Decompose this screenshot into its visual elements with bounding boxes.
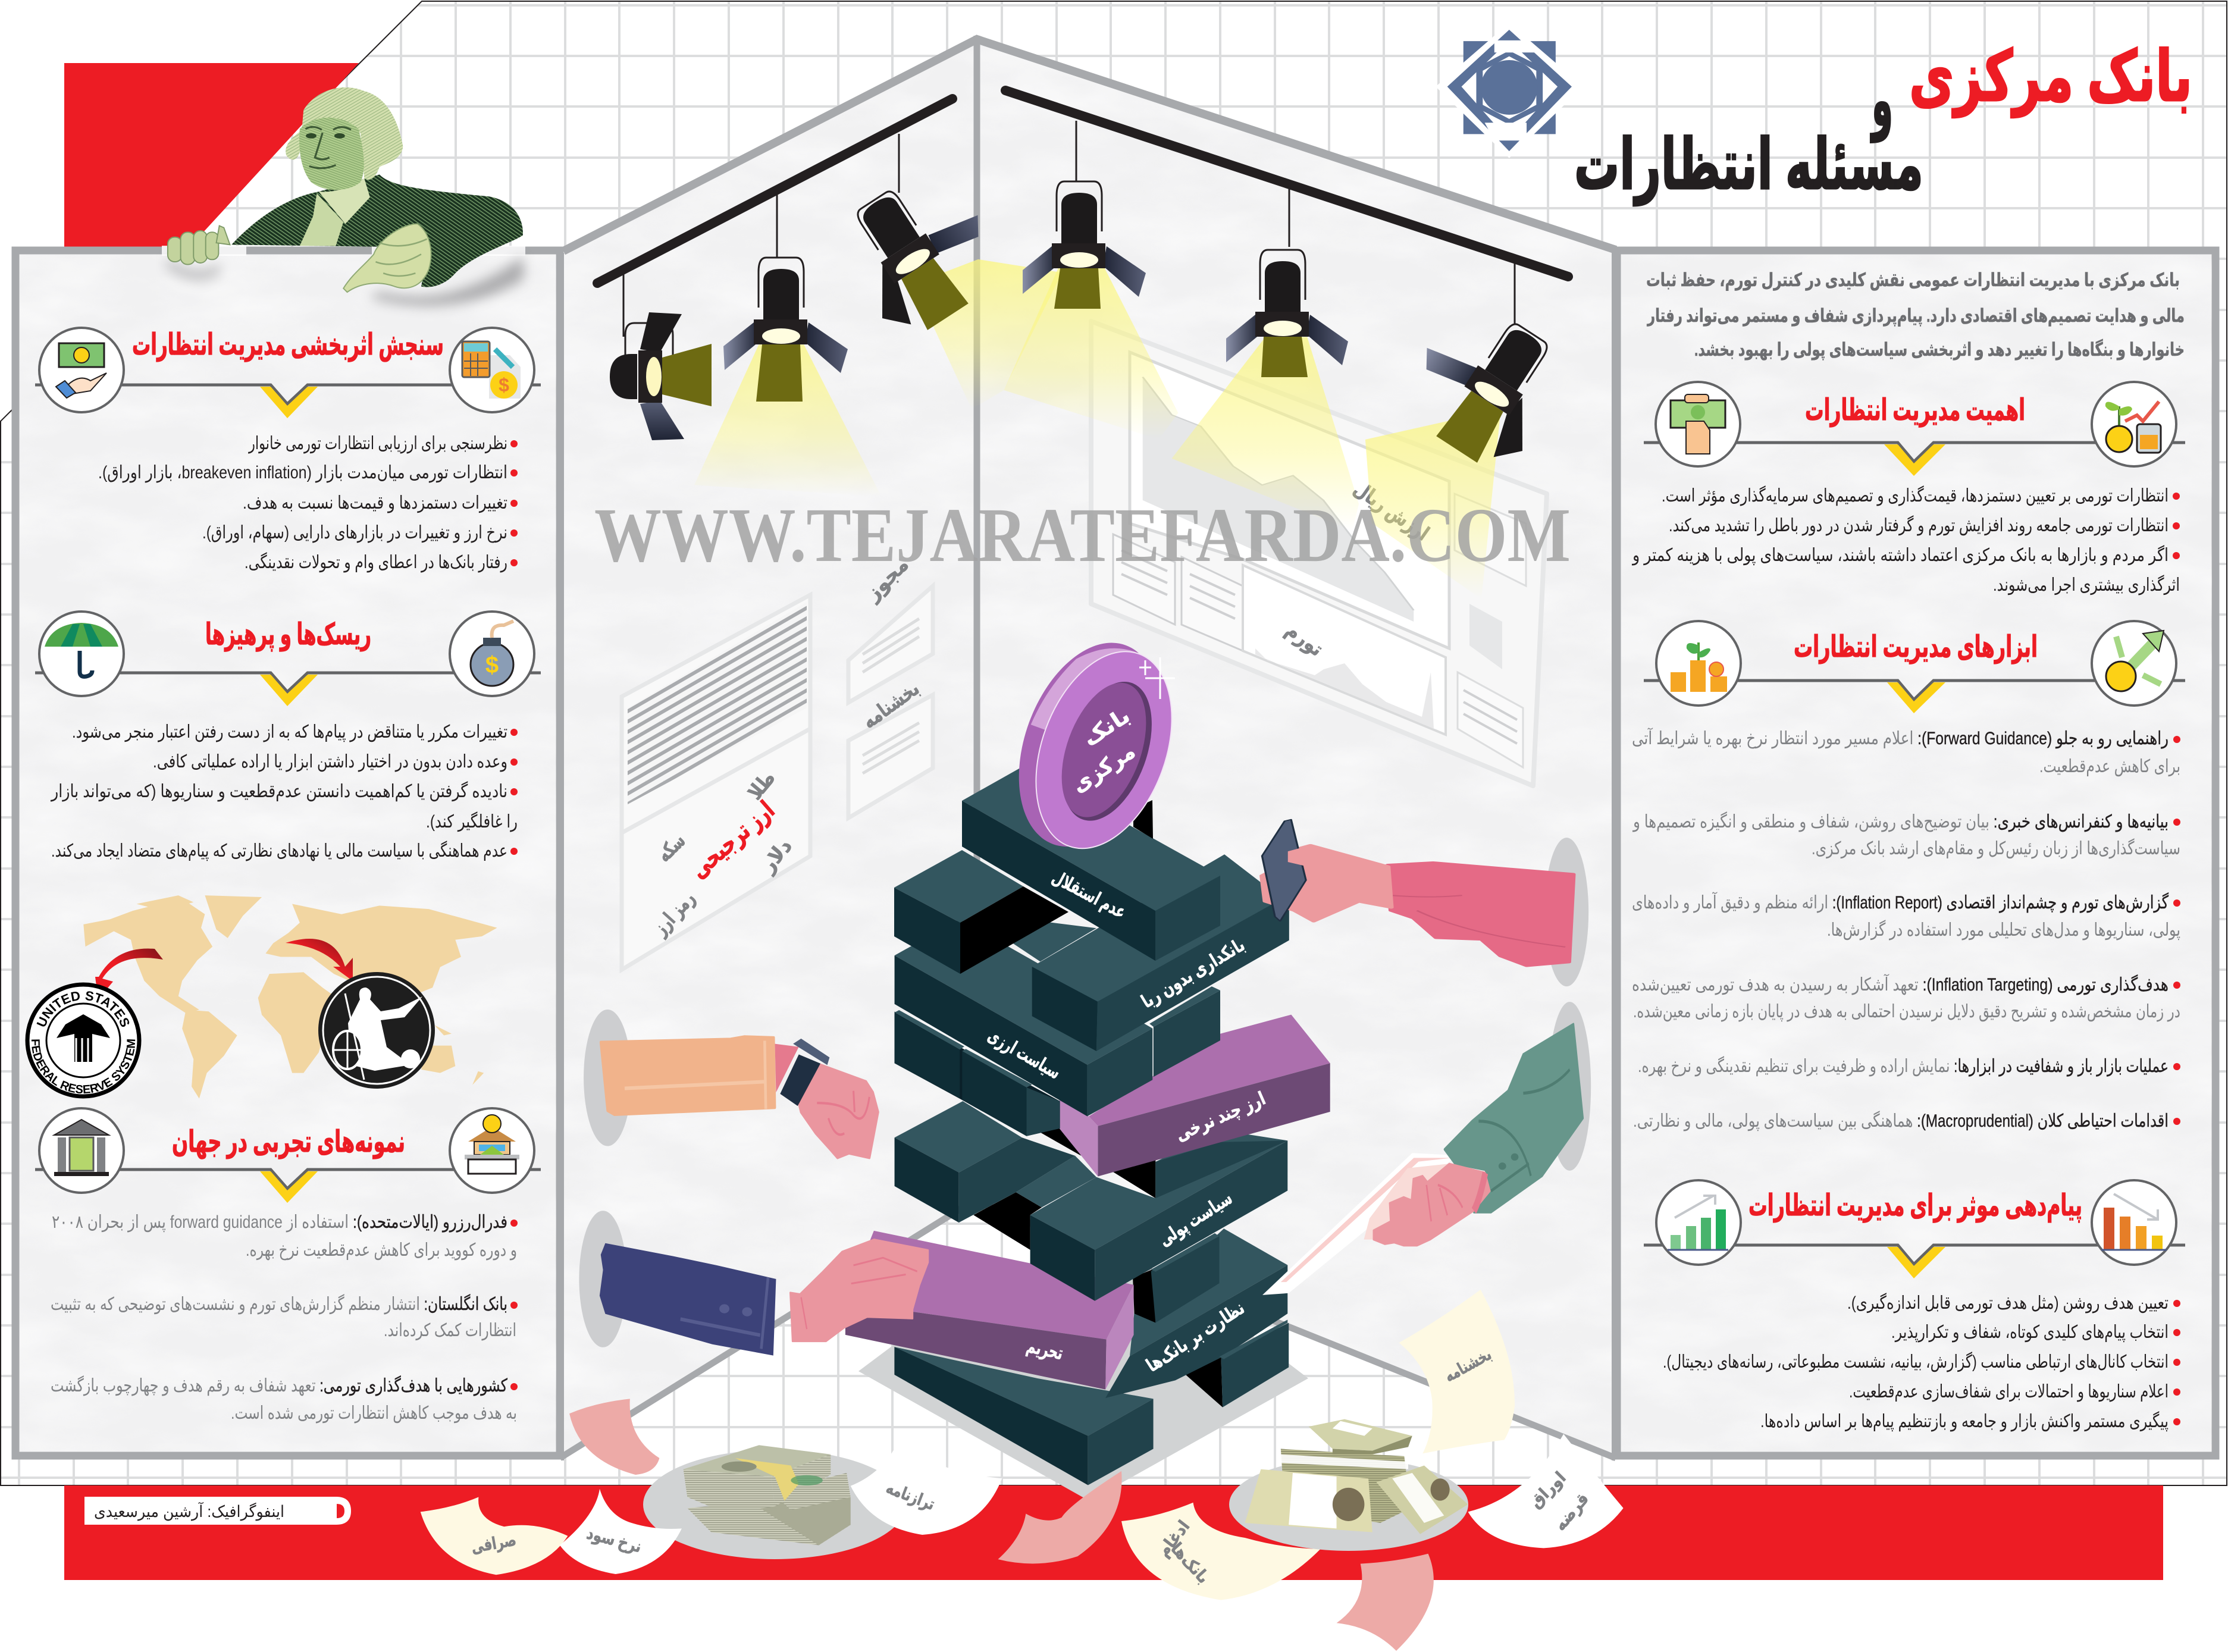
block label: currency policy: سیاست ارزی: [984, 1025, 1064, 1083]
label: licence: مجوز: [860, 553, 913, 606]
block label: interest-free banking: بانکداری بدون ربا: [1137, 934, 1249, 1012]
purple sanction block top: [845, 1231, 1134, 1340]
bullet list: effectiveness assessment: [98, 434, 518, 573]
seal: Federal Reserve: [27, 985, 139, 1096]
label: inflation: تورم: [1281, 619, 1327, 662]
spotlight 3: [826, 134, 1016, 347]
bullet list: effectiveness assessment: انتظارات تورمی میان‌مدت بازار (breakeven inflation، بازار اوراق).: [98, 463, 507, 483]
coin text: central: مرکزی: [1067, 739, 1140, 798]
block label: sanction: تحریم: [1024, 1336, 1065, 1365]
central bank coin: [993, 623, 1198, 871]
falling paper: pink left: [569, 1399, 659, 1475]
arrow: to Bank of England: [286, 939, 353, 981]
section header: tools: [1644, 621, 2185, 713]
arrow: to Federal Reserve: [95, 949, 163, 999]
lower stack row: [895, 1012, 1060, 1136]
block labels: عدم استقلال: [1048, 867, 1130, 923]
chart panel: [1130, 352, 1449, 648]
hand with paper: [1262, 1002, 1591, 1295]
small licence documents: [848, 553, 933, 818]
section header: effectiveness assessment: [35, 328, 541, 418]
supervision block: [1130, 1228, 1287, 1356]
label: crypto: رمز ارز: [648, 887, 700, 941]
spotlight 5: [1226, 189, 1348, 377]
label: preferential currency: ارز ترجیحی: [684, 795, 781, 884]
bullet list: effectiveness assessment: تغییرات دستمزدها و قیمت‌ها نسبت به هدف.: [243, 493, 507, 513]
falling paper: bank mergers: [1121, 1503, 1321, 1600]
inflation panel: [1243, 565, 1446, 735]
panel: right: [1612, 250, 2216, 1460]
bullet list: risks: [50, 722, 518, 861]
bonds label 1: اوراق: [1526, 1468, 1569, 1512]
coin text: bank: بانک: [1079, 703, 1134, 751]
seal: Federal Reserve: UNITED STATES: [37, 991, 130, 1027]
bullet list: risks: عدم هماهنگی با سیاست مالی یا نهادهای نظارتی که پیام‌های متضاد ایجاد می‌کند.: [51, 841, 507, 861]
balance sheet label: ترازنامه: [883, 1478, 938, 1514]
merger label 1: ادغام: [1154, 1517, 1193, 1560]
merger label 2: بانک‌ها: [1167, 1539, 1213, 1587]
icon: coin with arrows: [2092, 621, 2176, 706]
spotlight 6: [1389, 261, 1579, 480]
title: the issue of expectations: مسئله انتظارات: [1574, 126, 1923, 206]
spotlight 2: [723, 195, 848, 402]
icon: plant and jar: [2092, 382, 2176, 466]
cash tray shadow right: [1229, 1458, 1468, 1551]
central bank logo: [1436, 23, 1583, 158]
bullet list: world examples: بانک انگلستان: انتشار منظم گزارش‌های تورم و نشست‌های توضیحی که به تثبیت: [51, 1294, 507, 1315]
bullet list: effective messaging: [1663, 1293, 2180, 1432]
spotlight 1: [610, 274, 712, 440]
icon: bank with coin: [450, 1108, 534, 1193]
wall dashboard board: [1091, 321, 1547, 786]
heading: اهمیت مدیریت انتظارات: [1805, 393, 2025, 428]
bullet list: tools: هدف‌گذاری تورمی (Inflation Targeting): تعهد آشکار به رسیدن به هدف تورمی تعیین‌شده: [1632, 974, 2169, 995]
bullet list: tools: اقدامات احتیاطی کلان (Macroprudential): هماهنگی بین سیاست‌های پولی، مالی و نظارتی.: [1633, 1111, 2169, 1131]
block label: bank supervision: نظارت بر بانک‌ها: [1142, 1297, 1249, 1377]
bullet list: world examples: [51, 1212, 518, 1423]
credit text: اینفوگرافیک: آرشین میرسعیدی: [94, 1502, 284, 1521]
icon: falling bars: [2092, 1180, 2176, 1265]
falling paper: interest rate: [560, 1489, 682, 1574]
bullet list: tools: گزارش‌های تورم و چشم‌انداز اقتصادی (Inflation Report): ارائه منظم و دقیق آمار و داده‌های: [1632, 892, 2169, 913]
bullet list: risks: نادیده گرفتن یا کم‌اهمیت دانستن عدم‌قطعیت و سناریوها (که می‌تواند بازار: [50, 781, 507, 802]
panel: left: [15, 250, 564, 1460]
intro paragraph: [1646, 269, 2185, 361]
bonds label 2: قرضه: [1550, 1490, 1593, 1535]
heading: نمونه‌های تجربی در جهان: [172, 1125, 405, 1159]
icon: bomb: $: [485, 652, 499, 678]
central walls: [560, 36, 1616, 1458]
bullet list: tools: عملیات بازار باز و شفافیت در ابزارها: نمایش اراده و ظرفیت برای تنظیم نقدینگی و نرخ بهره.: [1638, 1056, 2169, 1077]
falling paper: balance sheet: [851, 1449, 1002, 1535]
block label: monetary policy: سیاست پولی: [1155, 1187, 1236, 1250]
track rods: [597, 90, 1568, 283]
icon: coins and plant: [1656, 621, 1741, 706]
icon: bank with phone: [39, 1108, 124, 1193]
icon: calculator and coin: $: [499, 374, 509, 396]
bullet list: risks: تغییرات مکرر یا متناقض در پیام‌ها که به از دست رفتن اعتبار منجر می‌شود.: [72, 722, 507, 742]
chart area: [1143, 377, 1414, 622]
section header: risks: [35, 612, 541, 706]
falling paper: circular: [1399, 1290, 1515, 1453]
hand with watch: [584, 1010, 878, 1158]
bullet list: importance: [1631, 485, 2180, 595]
spotlight beams: [694, 259, 1501, 599]
bullet list: effectiveness assessment: نرخ ارز و تغییرات در بازارهای دارایی (سهام، اوراق).: [202, 523, 507, 543]
dollar cash stack: [684, 1445, 851, 1545]
bullet list: risks: وعده دادن بدون در اختیار داشتن ابزار یا اراده عملیاتی کافی.: [153, 752, 507, 772]
circular label: بخشنامه: [1442, 1345, 1494, 1385]
falling paper: exchange: [421, 1497, 568, 1575]
left wall document board: [622, 595, 810, 970]
bullet list: risks: را غافلگیر کند).: [426, 811, 518, 832]
falling paper: pink bottom: [1337, 1554, 1434, 1651]
upper blocks: [894, 850, 1023, 923]
credit tag: [84, 1497, 351, 1525]
bullet list: tools: [1632, 728, 2180, 1131]
side cards: [1455, 494, 1526, 767]
bullet list: world examples: فدرال‌رزرو (ایالات‌متحده): استفاده از forward guidance پس از بحران ۲۰۰۸: [52, 1212, 507, 1233]
icon: calculator and coin: [450, 328, 534, 412]
purple multi-rate block: [1089, 1015, 1330, 1126]
bullet list: tools: برای کاهش عدم‌قطعیت.: [2039, 757, 2180, 776]
heading: ریسک‌ها و پرهیزها: [205, 617, 371, 652]
section header: importance: [1644, 382, 2185, 476]
bullet list: effectiveness assessment: رفتار بانک‌ها در اعطای وام و تحولات نقدینگی.: [245, 552, 507, 573]
label: gold: طلا: [744, 767, 780, 804]
hand holding sanction block: [579, 1211, 928, 1356]
exchange label: صرافی: [470, 1531, 518, 1557]
bullet list: effectiveness assessment: نظرسنجی برای ارزیابی انتظارات تورمی خانوار: [247, 434, 507, 453]
label: coin: سکه: [653, 829, 690, 866]
interest rate label: نرخ سود: [585, 1524, 644, 1557]
floor shadow under tower: [858, 1279, 1308, 1501]
label: dollar: دلار: [756, 835, 797, 877]
bullet list: tools: راهنمایی رو به جلو (Forward Guidance): اعلام مسیر مورد انتظار نرخ بهره یا شرایط آتی: [1632, 728, 2169, 749]
red corner block: [64, 63, 359, 247]
seal: Bank of England: [318, 972, 435, 1089]
red footer bar: [64, 1485, 2163, 1580]
spotlight 4: [1023, 121, 1146, 309]
currency policy block: [895, 919, 1152, 1065]
bullet list: world examples: انتظارات کمک کرده‌اند.: [384, 1321, 516, 1340]
monetary policy block: [1030, 1130, 1287, 1250]
icon: rising bars: [1656, 1180, 1741, 1265]
text: و: [1870, 61, 1893, 143]
world map: [83, 895, 497, 1099]
bullet list: world examples: و دوره کووید برای کاهش عدم‌قطعیت نرخ بهره.: [246, 1240, 517, 1261]
label: circular: بخشنامه: [858, 677, 923, 733]
icon: bomb: [450, 612, 534, 696]
bullet list: importance: اثرگذاری بیشتری اجرا می‌شوند.: [1993, 575, 2180, 595]
falling paper: bonds: [1468, 1434, 1624, 1548]
section header: world examples: [35, 1108, 541, 1203]
bullet list: world examples: کشورهایی با هدف‌گذاری تورمی: تعهد شفاف به رقم هدف و چهارچوب بازگشت: [51, 1375, 508, 1396]
icon: hand holding cash: [1656, 382, 1740, 466]
interest free banking block: [1032, 854, 1289, 1002]
Jenga tower: [845, 766, 1330, 1485]
falling paper: pink centre: [998, 1471, 1122, 1563]
bullet list: world examples: به هدف موجب کاهش انتظارات تورمی شده است.: [231, 1403, 517, 1423]
seal: Federal Reserve: FEDERAL RESERVE SYSTEM: [31, 1039, 136, 1093]
bottom blocks: [894, 1323, 1289, 1485]
icon: umbrella: [39, 612, 124, 696]
small document cards: [1113, 534, 1243, 651]
section header: effective messaging: [1644, 1180, 2185, 1278]
heading: سنجش اثربخشی مدیریت انتظارات: [132, 328, 444, 362]
heading: ابزارهای مدیریت انتظارات: [1794, 630, 2038, 664]
block label: multi-rate currency: ارز چند نرخی: [1173, 1087, 1269, 1146]
hand with phone: [1262, 820, 1588, 986]
icon: money over hand: [39, 328, 124, 412]
watermark: WWW.TEJARATEFARDA.COM: [594, 493, 1571, 578]
label: rial value: ارزش ریال: [1349, 477, 1433, 545]
bullet list: tools: بیانیه‌ها و کنفرانس‌های خبری: بیان توضیح‌های روشن، شفاف و منطقی و انگیزه تصمیم‌ها و: [1632, 811, 2169, 832]
mid left block: [1016, 1156, 1096, 1208]
cash tray shadow left: [643, 1450, 906, 1559]
portrait: Washington peeking over panel: [162, 87, 525, 306]
rial cash stack: [1245, 1419, 1468, 1534]
gap: [973, 1192, 1042, 1250]
